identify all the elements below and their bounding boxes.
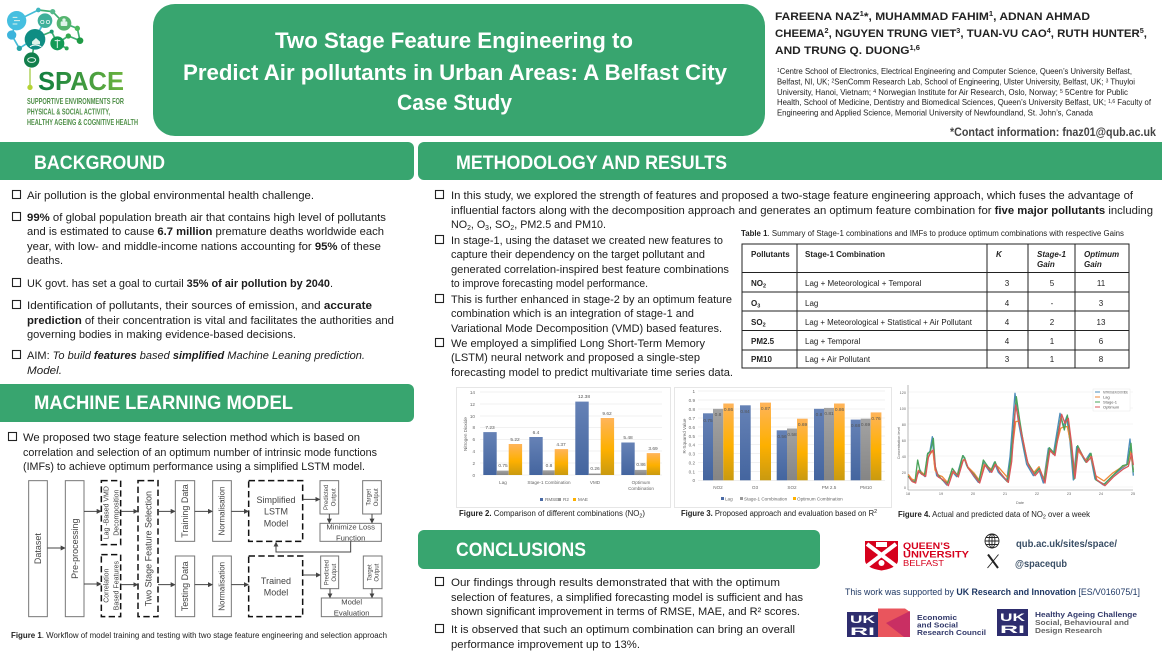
logo: UKRI Healthy Ageing Challenge: UK bbox=[1000, 612, 1025, 624]
authors: 1 bbox=[989, 11, 993, 18]
affiliations: 3 bbox=[1106, 78, 1108, 84]
panel heading: methodology and results bbox=[418, 142, 1162, 180]
panel: background text bbox=[12, 190, 394, 377]
chart: figure 2 bar chart: 10 bbox=[470, 414, 475, 419]
authors: AND TRUNG Q. DUONG bbox=[775, 45, 900, 57]
panel heading: conclusions: CONCLUSIONS bbox=[456, 540, 586, 561]
table: stage-1 combinations: - bbox=[1051, 299, 1054, 308]
affiliations: Engineering and Applied Science, Memorial University of Newfoundland, St. John’s, Canada bbox=[777, 108, 1093, 118]
table: stage-1 combinations: 1 bbox=[1050, 355, 1055, 364]
chart: figure 4 line chart: 0 bbox=[904, 486, 906, 490]
table: stage-1 combinations: 3 bbox=[1005, 355, 1010, 364]
text block: methodology stages: generated correlation-inspired best feature combinations bbox=[451, 264, 729, 276]
panel: background text: AIM: To build features based simplified Machine Leaning prediction. bbox=[27, 350, 365, 362]
social handle: @spacequb bbox=[1015, 558, 1067, 570]
chart: figure 4 line chart: 18 bbox=[906, 492, 910, 496]
logo: UKRI ESRC: Economic bbox=[917, 613, 957, 622]
panel: background text: Air pollution is the global environmental health challenge. bbox=[27, 190, 314, 202]
flowchart: model workflow: Output bbox=[374, 488, 380, 506]
authors: , bbox=[1144, 28, 1147, 40]
table: stage-1 combinations: PM10 bbox=[751, 355, 772, 364]
table: stage-1 combinations: Gain bbox=[1037, 260, 1055, 269]
chart: figure 3 bar chart: 0.56 bbox=[777, 434, 787, 440]
affiliations: Thuyloi bbox=[1108, 76, 1135, 86]
text block: methodology intro: In this study, we explored the strength of features and proposed a two-stage feature engineering approach, which fuses the advantage of bbox=[451, 190, 1134, 202]
text block: machine learning model description: We proposed two stage feature selection method which is based on bbox=[23, 432, 360, 444]
chart: figure 3 bar chart: 0.68 bbox=[851, 423, 860, 429]
logo: Queen's University Belfast: BELFAST bbox=[903, 558, 944, 568]
affiliations: Norwegian Institute for Air Research, Oslo, Norway; bbox=[876, 87, 1060, 97]
chart: figure 2 bar chart: 5.22 bbox=[510, 437, 520, 443]
chart: figure 2 bar chart: 6.4 bbox=[533, 430, 540, 436]
chart: figure 2 bar chart: R2 bbox=[563, 497, 569, 502]
table caption: Table 1. Summary of Stage-1 combinations and IMFs to produce optimum combinations with respective Gains bbox=[741, 229, 1124, 238]
text block: machine learning model description: correlation and selection of an optimum number of intrinsic mode functions bbox=[23, 447, 377, 459]
chart: figure 3 bar chart: 0.76 bbox=[871, 416, 881, 422]
text block: conclusions: It is observed that such an optimum combination can bring an overall bbox=[451, 624, 795, 636]
flowchart: model workflow: Decomposition bbox=[113, 489, 120, 536]
chart: figure 3 bar chart: NO2 bbox=[713, 485, 723, 490]
chart: figure 2 bar chart: 0 bbox=[472, 473, 475, 478]
chart: figure 4 line chart: 21 bbox=[1003, 492, 1007, 496]
flowchart: model workflow: Normalisation bbox=[218, 487, 227, 535]
chart: figure 4 line chart: 60 bbox=[902, 439, 906, 443]
table: stage-1 combinations: Gain bbox=[1084, 260, 1102, 269]
chart: figure 2 bar chart: 8 bbox=[472, 425, 475, 430]
chart: figure 2 bar chart: 3.69 bbox=[648, 446, 658, 452]
authors: 4 bbox=[1047, 28, 1051, 35]
affiliations: 5Centre for Public bbox=[1063, 87, 1129, 97]
flowchart: model workflow: Minimize Loss bbox=[326, 523, 375, 532]
authors: , ADNAN AHMAD bbox=[993, 11, 1090, 23]
chart: figure 2 bar chart: 0.26 bbox=[590, 466, 600, 472]
chart: figure 4 line chart: 120 bbox=[900, 391, 906, 395]
chart: figure 4 line chart: 24 bbox=[1099, 492, 1103, 496]
chart: figure 4 line chart: NITROGEN DIOXIDE bbox=[1103, 390, 1128, 394]
flowchart: model workflow: Dataset bbox=[33, 533, 43, 564]
chart: figure 3 bar chart bbox=[674, 388, 892, 508]
flowchart: model workflow: Model bbox=[264, 588, 288, 598]
chart: figure 2 bar chart: 6 bbox=[472, 437, 475, 442]
caption: figure 4: over a week bbox=[1046, 510, 1091, 519]
chart: figure 3 bar chart: Stage-1 Combination bbox=[744, 496, 788, 502]
flowchart: model workflow bbox=[29, 481, 382, 618]
panel: background text: UK govt. has set a goal to curtail 35% of air pollution by 2040. bbox=[27, 278, 333, 290]
flowchart: model workflow: Normalisation bbox=[218, 562, 227, 611]
chart: figure 3 bar chart: 0.69 bbox=[798, 422, 807, 428]
chart: figure 3 bar chart: 0 bbox=[692, 478, 695, 483]
table: stage-1 combinations: Lag + Temporal bbox=[805, 337, 860, 346]
panel heading: methodology and results: METHODOLOGY AND RESULTS bbox=[456, 153, 727, 174]
authors: *, MUHAMMAD FAHIM bbox=[864, 11, 989, 23]
flowchart: model workflow: Target bbox=[367, 489, 373, 506]
title: Case Study bbox=[397, 90, 513, 115]
chart: figure 3 bar chart: 0.86 bbox=[835, 407, 844, 413]
table: stage-1 combinations: 13 bbox=[1097, 318, 1106, 327]
panel: background text: 99% of global population breath air that contains high level of pollutants bbox=[27, 212, 387, 224]
flowchart: model workflow: Training Data bbox=[180, 484, 190, 538]
flowchart: model workflow: Testing Data bbox=[180, 561, 190, 611]
chart: figure 4 line chart: 22 bbox=[1035, 492, 1039, 496]
chart: figure 4 line chart bbox=[897, 385, 1135, 505]
table: stage-1 combinations: Optimum bbox=[1084, 250, 1119, 259]
icon: globe bbox=[985, 534, 999, 548]
flowchart: model workflow: Correlation bbox=[104, 568, 111, 603]
chart: figure 2 bar chart: 0.86 bbox=[636, 462, 646, 468]
logo: SPACE project: PHYSICAL & SOCIAL ACTIVITY, bbox=[27, 106, 110, 116]
flowchart: model workflow: Based Features bbox=[113, 561, 120, 610]
text block: methodology intro: , PM2.5 and PM10. bbox=[514, 219, 606, 231]
flowchart: model workflow: Model bbox=[264, 518, 288, 528]
affiliations: 1,6 bbox=[1108, 99, 1115, 105]
chart: figure 4 line chart: 20 bbox=[902, 471, 906, 475]
chart: figure 3 bar chart: 0.5 bbox=[689, 434, 695, 439]
table: stage-1 combinations: Lag + Meteorological + Statistical + Air Pollutant bbox=[805, 318, 973, 327]
chart: figure 2 bar chart: Lag bbox=[499, 480, 507, 485]
chart: figure 2 bar chart: 5.48 bbox=[623, 435, 633, 441]
panel: background text: prediction of their concentration is vital and facilitates the authorities and bbox=[27, 315, 394, 327]
logo: UKRI ESRC bbox=[847, 608, 986, 638]
chart: figure 3 bar chart: 0.6 bbox=[689, 425, 695, 430]
chart: figure 3 bar chart: 0.2 bbox=[689, 460, 695, 466]
table: stage-1 combinations: Stage-1 Combination bbox=[805, 250, 885, 259]
authors bbox=[775, 11, 1147, 57]
chart: figure 4 line chart: 40 bbox=[902, 455, 906, 459]
chart: figure 3 bar chart: 0.58 bbox=[787, 432, 797, 438]
chart: figure 3 bar chart: 0.4 bbox=[689, 442, 695, 448]
chart: figure 2 bar chart: 0.75 bbox=[498, 463, 508, 469]
authors: 3 bbox=[956, 28, 960, 35]
logo: SPACE project: HEALTHY AGEING & COGNITIVE HEALTH bbox=[27, 117, 138, 127]
chart: figure 3 bar chart: 0.75 bbox=[703, 418, 713, 424]
chart: figure 3 bar chart: 0.8 bbox=[816, 412, 823, 418]
table: stage-1 combinations: 3 bbox=[1005, 279, 1010, 288]
affiliations: 5 bbox=[1060, 89, 1063, 95]
text block: methodology stages: This is further enhanced in stage-2 by an optimum feature bbox=[451, 294, 732, 306]
flowchart: model workflow: Two Stage Feature Selection bbox=[144, 491, 154, 606]
chart: figure 3 bar chart: O3 bbox=[752, 485, 759, 490]
chart: figure 3 bar chart: R-Squared Value bbox=[682, 418, 687, 453]
affiliations: Centre School of Electronics, Electrical Engineering and Computer Science, Queen’s University Belfast, bbox=[780, 66, 1132, 76]
chart: figure 3 bar chart: 0.87 bbox=[761, 406, 770, 412]
text block: methodology stages: In stage-1, using the dataset we created new features to bbox=[451, 235, 723, 247]
panel: background text: and is estimated to cause 6.7 million premature deaths worldwide each bbox=[27, 226, 384, 238]
chart: figure 4 line chart: 80 bbox=[902, 423, 906, 427]
chart: figure 4 line chart: Lag bbox=[1103, 394, 1110, 400]
text block: methodology stages: Variational Mode Decomposition (VMD) based features. bbox=[451, 323, 722, 335]
flowchart: model workflow: Target bbox=[367, 564, 373, 581]
flowchart: model workflow: LSTM bbox=[264, 507, 288, 517]
flowchart: model workflow: Pre-processing bbox=[70, 518, 80, 579]
table: stage-1 combinations: 4 bbox=[1005, 318, 1010, 327]
chart: figure 4 line chart: 23 bbox=[1067, 492, 1071, 496]
flowchart: model workflow: Output bbox=[332, 563, 338, 582]
affiliations: Health, School of Medicine, Dentistry and Biomedical Sciences, Queen’s University Belfast, UK; bbox=[777, 97, 1137, 107]
text block: machine learning model description bbox=[8, 432, 377, 473]
chart: figure 2 bar chart: Optimum bbox=[632, 480, 650, 485]
chart: figure 2 bar chart: Stage-1 Combination bbox=[527, 480, 571, 485]
chart: figure 2 bar chart: 4 bbox=[472, 449, 475, 454]
chart: figure 2 bar chart: MAE bbox=[578, 497, 588, 502]
chart: figure 4 line chart: 25 bbox=[1131, 492, 1135, 496]
text block: conclusions bbox=[436, 577, 803, 651]
text block: methodology intro: NO bbox=[451, 219, 468, 231]
panel: background text: year, with low- and middle-income nations accounting for 95% of these bbox=[27, 241, 381, 253]
text block: methodology stages: capture their dependency on the target pollutant and bbox=[451, 249, 705, 261]
chart: figure 3 bar chart: 0.1 bbox=[689, 470, 695, 474]
text block: methodology intro: , O bbox=[471, 219, 486, 231]
authors: , NGUYEN TRUNG VIET bbox=[829, 28, 957, 40]
text block: conclusions: selection of features, a simplified forecasting model is sufficient and has bbox=[451, 592, 803, 604]
table: stage-1 combinations: Stage-1 bbox=[1037, 250, 1066, 259]
chart: figure 2 bar chart: 12.38 bbox=[578, 394, 590, 400]
table: stage-1 combinations: 8 bbox=[1099, 355, 1104, 364]
text block: methodology intro: influential factors along with the decomposition approach and generates an optimum feature combination for five major pollutants including bbox=[451, 205, 1153, 217]
authors: 1,6 bbox=[909, 45, 920, 52]
authors: 2 bbox=[825, 28, 829, 35]
logo: UKRI ESRC: Research Council bbox=[917, 628, 986, 637]
text block: methodology intro: 2 bbox=[510, 225, 514, 232]
table: stage-1 combinations: 2 bbox=[763, 284, 766, 290]
caption: figure 3: Figure 3. Proposed approach and evaluation based on R bbox=[681, 509, 882, 518]
chart: figure 4 line chart: 19 bbox=[939, 492, 943, 496]
panel heading: background bbox=[0, 142, 414, 180]
table: stage-1 combinations: 2 bbox=[1050, 318, 1055, 327]
caption: figure 3: 2 bbox=[874, 509, 877, 515]
text block: methodology intro bbox=[436, 190, 1153, 232]
flowchart: model workflow: Trained bbox=[261, 576, 291, 586]
chart: figure 2 bar chart: 14 bbox=[470, 390, 475, 395]
logo: UKRI Healthy Ageing Challenge: Design Research bbox=[1035, 626, 1102, 635]
logo: UKRI Healthy Ageing Challenge: RI bbox=[1000, 624, 1025, 636]
logo: UKRI Healthy Ageing Challenge bbox=[997, 609, 1137, 636]
text block: conclusions: shown significant improvement in terms of RMSE, MAE, and R² scores. bbox=[451, 606, 800, 618]
chart: figure 3 bar chart: Optimum Combination bbox=[797, 496, 843, 502]
affiliations: University, Hanoi, Vietnam; bbox=[777, 87, 879, 97]
chart: figure 3 bar chart: 0.84 bbox=[740, 409, 750, 415]
chart: figure 3 bar chart: 0.81 bbox=[824, 411, 834, 417]
logo: UKRI ESRC: and Social bbox=[917, 620, 958, 630]
logo: UKRI ESRC: RI bbox=[850, 626, 875, 638]
text block: methodology intro: 3 bbox=[485, 225, 489, 232]
chart: figure 3 bar chart: 0.7 bbox=[689, 416, 695, 421]
logo: SPACE project bbox=[7, 8, 138, 127]
table: stage-1 combinations bbox=[742, 244, 1129, 368]
text block: methodology intro: 2 bbox=[467, 225, 471, 232]
affiliations: Faculty of bbox=[1115, 97, 1152, 107]
chart: figure 3 bar chart: PM 2.5 bbox=[822, 485, 837, 490]
panel: background text: Identification of pollutants, their sources of emission, and accurate bbox=[27, 300, 372, 312]
chart: figure 4 line chart: Date bbox=[1016, 501, 1024, 505]
affiliations: 4 bbox=[873, 89, 876, 95]
text block: methodology stages bbox=[436, 235, 733, 379]
affiliations: 1 bbox=[777, 68, 780, 74]
table: stage-1 combinations: 1 bbox=[1050, 337, 1055, 346]
chart: figure 2 bar chart: 12 bbox=[470, 402, 475, 407]
affiliations bbox=[777, 66, 1152, 118]
chart: figure 4 line chart: 100 bbox=[900, 407, 906, 411]
table: stage-1 combinations: 6 bbox=[1099, 337, 1104, 346]
text block: machine learning model description: (IMFs) to achieve optimum performance using a simplified LSTM model. bbox=[23, 461, 365, 473]
logo: SPACE project: SPACE bbox=[38, 66, 124, 96]
website link: qub.ac.uk/sites/space/ bbox=[1016, 538, 1117, 550]
authors: 5 bbox=[1140, 28, 1144, 35]
table: stage-1 combinations: 11 bbox=[1097, 279, 1106, 288]
logo: UKRI ESRC: UK bbox=[850, 614, 875, 626]
caption: figure 2: Figure 2. Comparison of different combinations (NO bbox=[459, 509, 643, 518]
logo: UKRI Healthy Ageing Challenge: Social, Behavioural and bbox=[1035, 618, 1129, 627]
authors: FAREENA NAZ bbox=[775, 11, 853, 23]
panel: background text: Model. bbox=[27, 365, 62, 377]
flowchart: model workflow: Output bbox=[331, 488, 337, 506]
text block: methodology stages: combination which is an integration of stage-1 and bbox=[451, 308, 694, 320]
table: stage-1 combinations: Lag bbox=[805, 299, 818, 308]
table: stage-1 combinations: 3 bbox=[1099, 299, 1104, 308]
table: stage-1 combinations: 2 bbox=[763, 322, 766, 328]
flowchart: model workflow: Output bbox=[375, 563, 381, 582]
authors: , RUTH HUNTER bbox=[1051, 28, 1140, 40]
logo: SPACE project: SUPPORTIVE ENVIRONMENTS FOR bbox=[27, 96, 124, 106]
text block: methodology intro: , SO bbox=[489, 219, 511, 231]
funding statement: This work was supported by UK Research and Innovation [ES/V016075/1] bbox=[845, 587, 1140, 597]
chart: figure 3 bar chart: 0.69 bbox=[861, 422, 870, 428]
authors: CHEEMA bbox=[775, 28, 823, 40]
chart: figure 3 bar chart: 0.8 bbox=[715, 412, 722, 418]
chart: figure 2 bar chart: 9.62 bbox=[602, 411, 612, 417]
logo: UKRI Healthy Ageing Challenge: Healthy Ageing Challenge bbox=[1035, 610, 1137, 619]
flowchart: model workflow: Lag -Based VMD bbox=[104, 486, 111, 539]
chart: figure 3 bar chart: 1 bbox=[692, 389, 695, 394]
table: stage-1 combinations: SO bbox=[751, 318, 763, 327]
panel: background text: governing bodies in making evidence-based decisions. bbox=[27, 329, 296, 341]
text block: conclusions: Our findings through results demonstrated that with the optimum bbox=[451, 577, 780, 589]
affiliations: Belfast, NI, UK; bbox=[777, 76, 835, 86]
table: stage-1 combinations: Lag + Air Pollutant bbox=[805, 355, 871, 364]
table: stage-1 combinations: Pollutants bbox=[751, 250, 790, 259]
icon: X bbox=[988, 554, 998, 568]
authors: 1 bbox=[860, 11, 864, 18]
panel heading: background: BACKGROUND bbox=[34, 153, 165, 174]
table: stage-1 combinations: PM2.5 bbox=[751, 337, 775, 346]
chart: figure 3 bar chart: 0.3 bbox=[689, 452, 695, 456]
caption: figure 1: Figure 1. Workflow of model training and testing with two stage feature engineering and selection approach bbox=[11, 631, 387, 640]
table: stage-1 combinations: O bbox=[751, 299, 757, 308]
flowchart: model workflow: Evaluation bbox=[334, 609, 370, 618]
chart: figure 3 bar chart: PM10 bbox=[860, 485, 872, 490]
caption: figure 4: Figure 4. Actual and predicted data of NO bbox=[898, 510, 1046, 519]
chart: figure 3 bar chart: 0.9 bbox=[689, 398, 695, 403]
flowchart: model workflow: Model bbox=[341, 598, 362, 607]
chart: figure 3 bar chart: SO2 bbox=[787, 485, 797, 490]
table: stage-1 combinations: 4 bbox=[1005, 337, 1010, 346]
text block: methodology stages: forecasting model to predict multivariate time series data. bbox=[451, 367, 733, 379]
logo: Queen's University Belfast: QUEEN’S bbox=[903, 541, 950, 551]
chart: figure 2 bar chart: 4.37 bbox=[556, 442, 566, 448]
title: Predict Air pollutants in Urban Areas: A Belfast City bbox=[183, 60, 728, 85]
panel heading: machine learning model bbox=[0, 384, 414, 422]
chart: figure 3 bar chart: 0.8 bbox=[689, 407, 695, 412]
chart: figure 2 bar chart: VMD bbox=[590, 480, 601, 485]
chart: figure 2 bar chart: Nitrogen Dioxide bbox=[463, 417, 468, 451]
table: stage-1 combinations: 3 bbox=[757, 304, 760, 310]
table: stage-1 combinations: Lag + Meteorological + Temporal bbox=[805, 279, 922, 288]
flowchart: model workflow: Simplified bbox=[257, 495, 295, 505]
text block: methodology stages: (LSTM) neural network and proposed a single-step bbox=[451, 352, 700, 364]
logo: Queen's University Belfast: UNIVERSITY bbox=[903, 550, 969, 560]
chart: figure 4 line chart: 20 bbox=[971, 492, 975, 496]
text block: conclusions: performance improvement up to 13%. bbox=[451, 639, 640, 651]
panel heading: conclusions bbox=[418, 530, 820, 569]
panel: background text: deaths. bbox=[27, 255, 63, 267]
flowchart: model workflow: Predicted bbox=[324, 485, 330, 510]
table: stage-1 combinations: K bbox=[996, 250, 1003, 259]
caption: figure 2: ) bbox=[642, 509, 645, 518]
caption: figure 4: 2 bbox=[1043, 514, 1046, 520]
chart: figure 4 line chart: Stage-1 bbox=[1103, 400, 1118, 404]
table: stage-1 combinations: 4 bbox=[1005, 299, 1010, 308]
chart: figure 3 bar chart: Lag bbox=[725, 496, 733, 502]
affiliations: SenComm Research Lab, School of Engineering, Ulster University, Belfast, UK; bbox=[834, 76, 1106, 86]
text block: methodology stages: We employed a simplified Long Short-Term Memory bbox=[451, 338, 705, 350]
chart: figure 2 bar chart: Combination bbox=[628, 486, 654, 491]
chart: figure 2 bar chart bbox=[456, 388, 670, 508]
affiliations: 2 bbox=[831, 78, 834, 84]
title bbox=[183, 28, 728, 115]
table: stage-1 combinations: NO bbox=[751, 279, 763, 288]
title panel bbox=[153, 4, 765, 136]
table: stage-1 combinations: 5 bbox=[1050, 279, 1055, 288]
chart: figure 2 bar chart: RMSE bbox=[545, 497, 558, 502]
caption: figure 2: 2 bbox=[639, 514, 642, 520]
chart: figure 4 line chart: Concentration level bbox=[897, 427, 901, 459]
chart: figure 3 bar chart: 0.86 bbox=[724, 407, 733, 413]
chart: figure 4 line chart: Optimum bbox=[1103, 404, 1120, 410]
chart: figure 2 bar chart: 7.23 bbox=[485, 425, 495, 431]
flowchart: model workflow: Predicted bbox=[325, 560, 331, 585]
text block: methodology stages: to improve forecasting model performance. bbox=[451, 278, 648, 290]
authors: , TUAN-VU CAO bbox=[960, 28, 1047, 40]
logo: Queen's University Belfast bbox=[865, 541, 969, 570]
chart: figure 2 bar chart: 2 bbox=[472, 461, 475, 466]
title: Two Stage Feature Engineering to bbox=[275, 28, 633, 53]
flowchart: model workflow: Function bbox=[336, 534, 365, 543]
panel heading: machine learning model: MACHINE LEARNING MODEL bbox=[34, 393, 293, 414]
chart: figure 2 bar chart: 0.8 bbox=[546, 463, 553, 469]
